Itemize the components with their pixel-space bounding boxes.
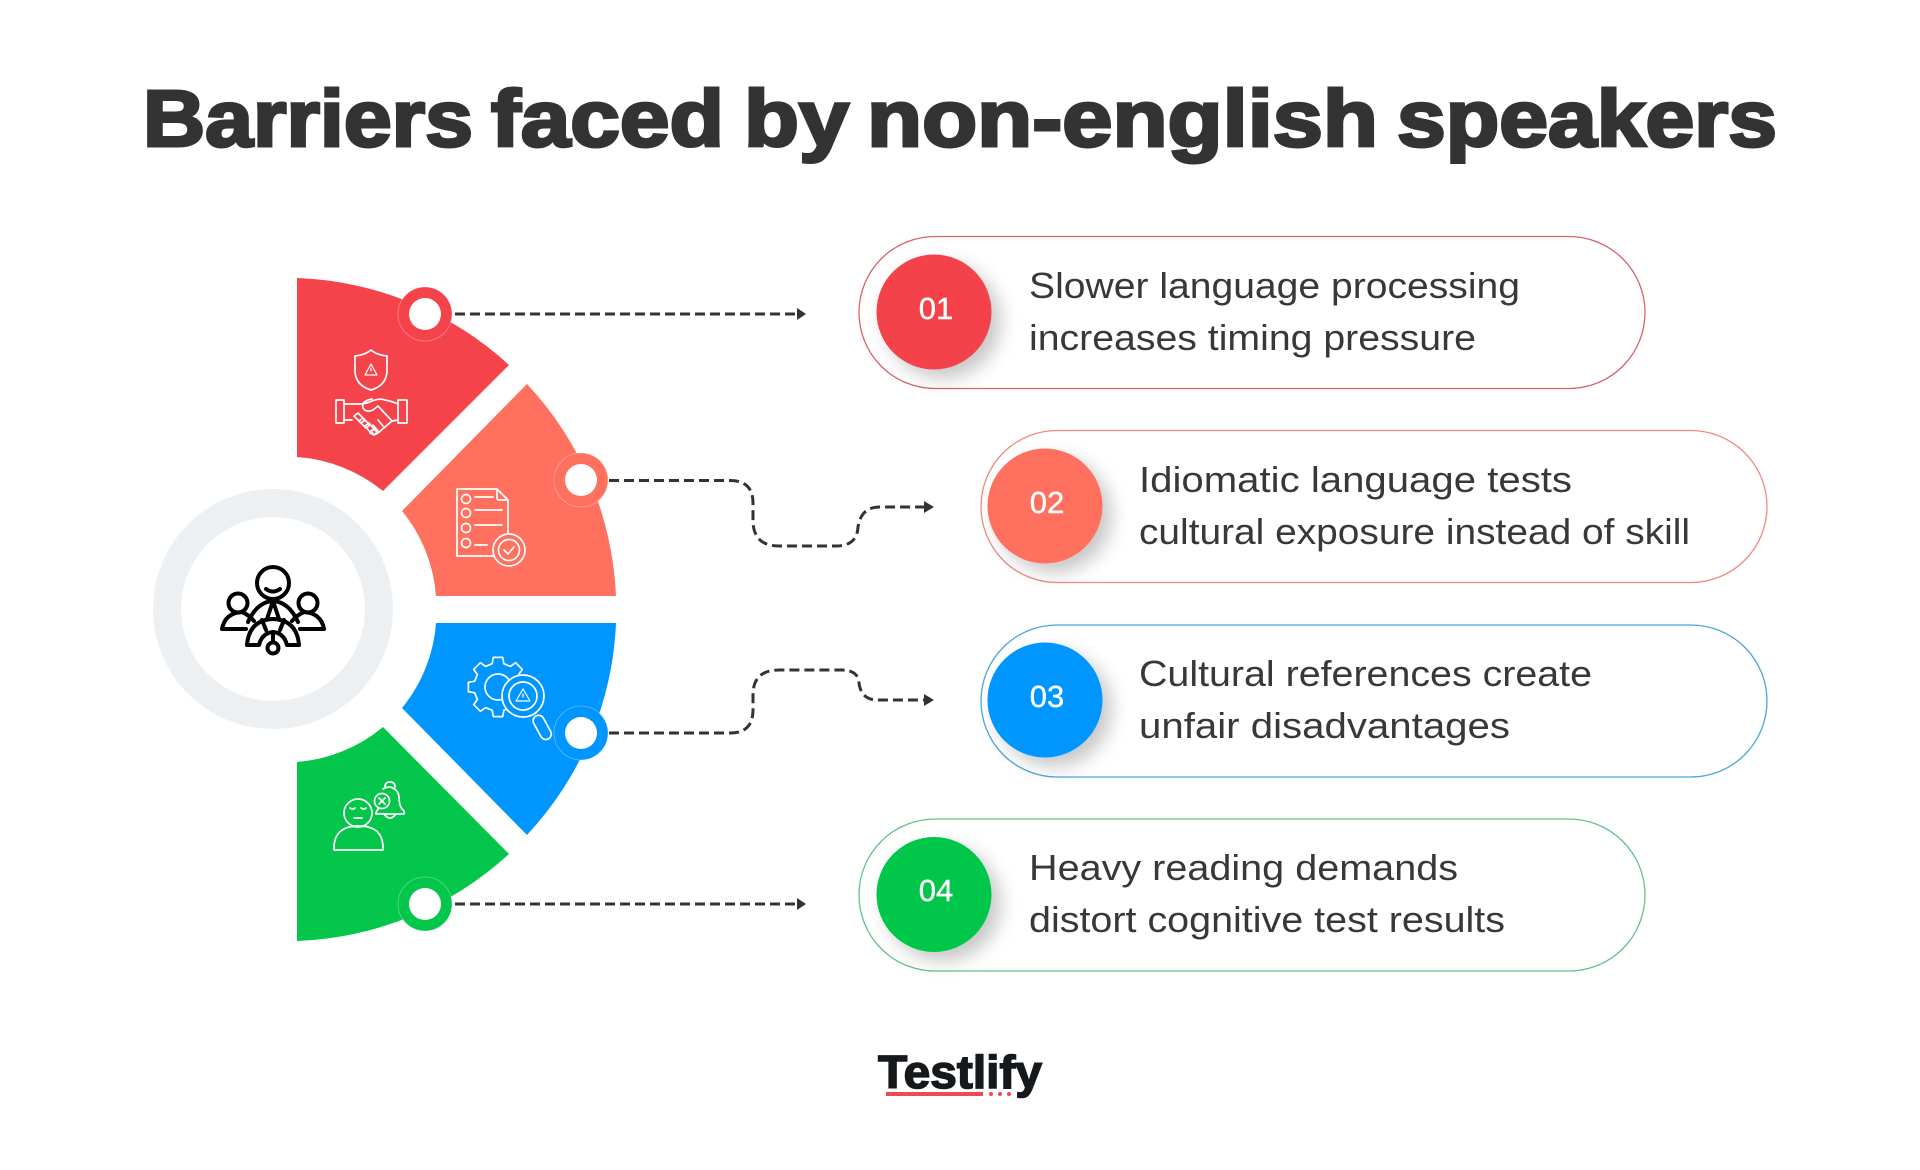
text block 01: increases timing pressure bbox=[1029, 317, 1476, 358]
centre circle with team icon bbox=[167, 503, 379, 715]
icon: checklist document bbox=[457, 489, 525, 566]
arrow: connector 2 bbox=[609, 480, 934, 546]
panel: item 04 bbox=[859, 819, 1645, 971]
panel: item 04: 04 bbox=[919, 873, 953, 908]
text block 02: Idiomatic language tests bbox=[1139, 459, 1572, 500]
text block 03: unfair disadvantages bbox=[1139, 705, 1510, 746]
title: Barriers bbox=[143, 74, 473, 163]
sector 3: blue with gear and magnifier icon bbox=[402, 623, 616, 835]
panel: item 03 bbox=[981, 625, 1767, 777]
title: non-english bbox=[867, 74, 1378, 163]
text block 04 bbox=[1029, 847, 1505, 940]
arrow: connector 3 bbox=[609, 670, 934, 733]
logo: Testlify: Testlify bbox=[878, 1046, 1042, 1098]
dot 2 bbox=[554, 453, 608, 507]
icon: shield and handshake bbox=[336, 350, 407, 435]
text block 01: Slower language processing bbox=[1029, 265, 1520, 306]
text block 01 bbox=[1029, 265, 1520, 358]
text block 03 bbox=[1139, 653, 1592, 746]
icon: gear and magnifier bbox=[468, 657, 553, 741]
title: speakers bbox=[1397, 74, 1777, 163]
title: faced bbox=[491, 74, 724, 163]
title bbox=[143, 74, 1777, 163]
panel: item 02 bbox=[981, 430, 1767, 582]
arrow: connector 1 bbox=[455, 308, 806, 320]
text block 04: Heavy reading demands bbox=[1029, 847, 1458, 888]
arrow: connector 4 bbox=[455, 898, 806, 910]
text block 02 bbox=[1139, 459, 1690, 552]
panel: item 02: 02 bbox=[1030, 485, 1064, 520]
text block 03: Cultural references create bbox=[1139, 653, 1592, 694]
panel: item 01 bbox=[859, 236, 1645, 388]
icon: person and bell bbox=[334, 782, 404, 850]
icon: team bbox=[222, 567, 324, 654]
panel: item 01: 01 bbox=[919, 291, 953, 326]
text block 04: distort cognitive test results bbox=[1029, 899, 1505, 940]
title: by bbox=[744, 74, 850, 163]
dot 1 bbox=[398, 287, 452, 341]
sector 4: green with person and bell icon bbox=[297, 727, 509, 941]
text block 02: cultural exposure instead of skill bbox=[1139, 511, 1690, 552]
dot 4 bbox=[398, 877, 452, 931]
panel: item 03: 03 bbox=[1030, 679, 1064, 714]
sector 1: red with handshake icon bbox=[297, 278, 509, 491]
dot 3 bbox=[554, 706, 608, 760]
sector 2: coral with checklist icon bbox=[402, 384, 616, 596]
